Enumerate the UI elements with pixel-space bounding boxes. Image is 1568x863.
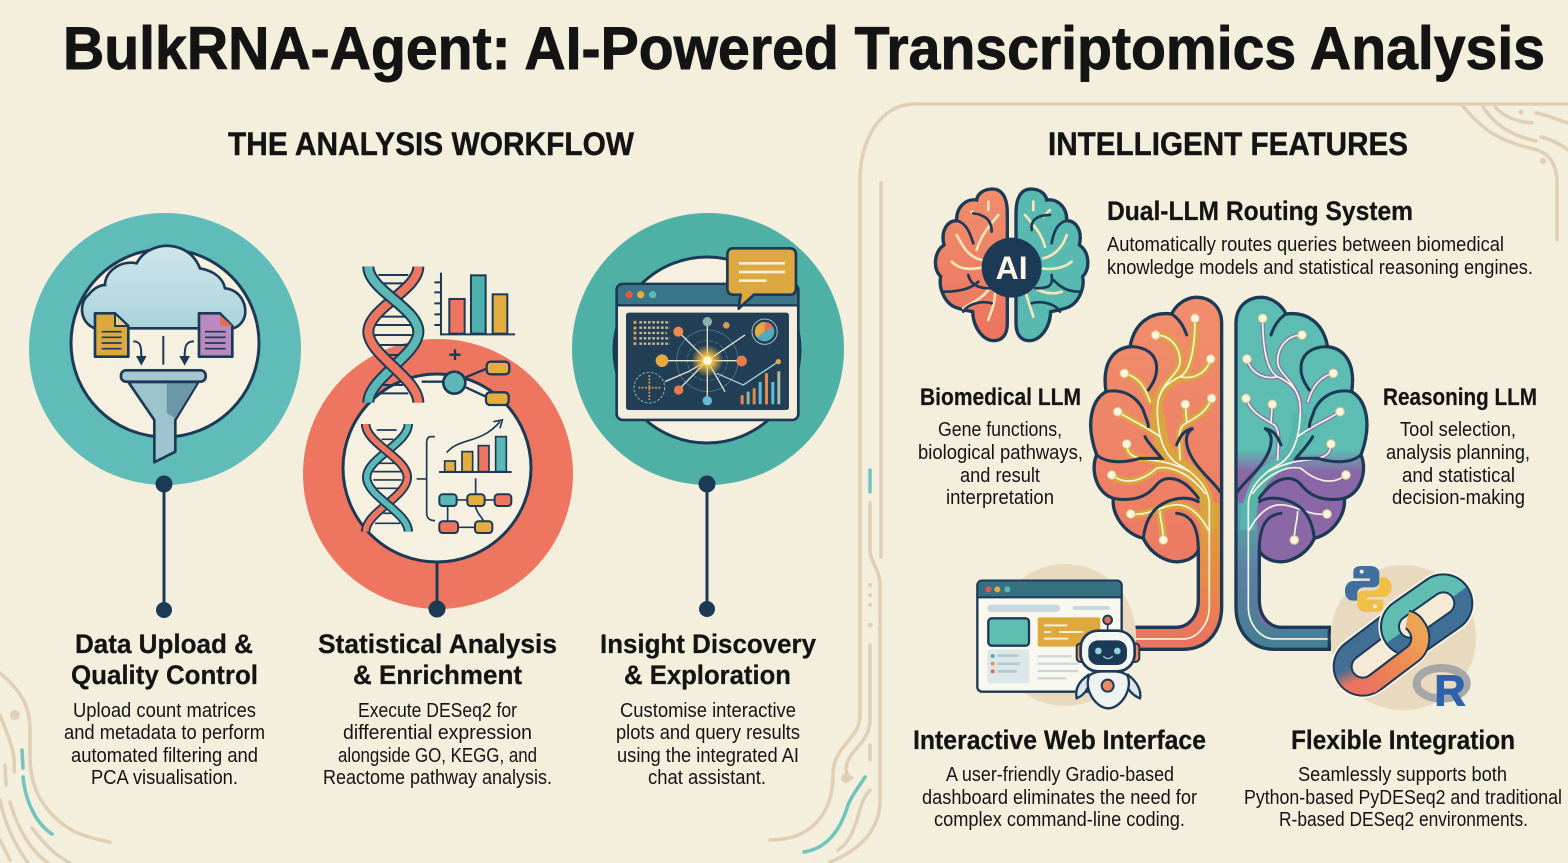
python logo (1345, 566, 1392, 612)
icon: cloud, documents and funnel (29, 213, 301, 485)
heading: the analysis workflow: THE ANALYSIS WORKFLOW (228, 126, 635, 162)
step 3 text: Customise interactive (620, 700, 796, 722)
AI label: AI (996, 250, 1028, 286)
step 2 text: alongside GO, KEGG, and (338, 745, 537, 767)
step 2 text: & Enrichment (353, 660, 522, 690)
interactive web interface text (913, 725, 1206, 831)
heading: intelligent features: INTELLIGENT FEATURES (1048, 126, 1408, 162)
lower chain link (1363, 638, 1400, 667)
central split brain with tree branches and pipes (1091, 297, 1367, 649)
flexible integration text (1244, 725, 1562, 831)
biomedical LLM text: Biomedical LLM (920, 384, 1081, 411)
biomedical LLM text: interpretation (946, 487, 1054, 509)
connector: step 3 pin (698, 476, 716, 617)
biomedical LLM text: Gene functions, (938, 419, 1062, 441)
feature: dual-LLM routing system (935, 189, 1533, 341)
reasoning LLM text: and statistical (1402, 465, 1515, 487)
reasoning LLM text: Tool selection, (1400, 419, 1516, 441)
step 3 text: chat assistant. (648, 767, 766, 789)
connector: step 2 pin (428, 562, 446, 618)
interactive web interface text: dashboard eliminates the need for (922, 787, 1197, 809)
dual-LLM text: knowledge models and statistical reasoning engines. (1107, 257, 1533, 279)
step 1 text: Upload count matrices (73, 700, 256, 722)
step 3 text: Insight Discovery (600, 629, 816, 659)
step 1 text (64, 629, 265, 789)
interactive web interface text: A user-friendly Gradio-based (946, 764, 1174, 786)
reasoning LLM text (1383, 384, 1537, 509)
step 1 text: automated filtering and (71, 745, 258, 767)
step 1 text: Data Upload & (75, 629, 253, 659)
step 2 text: differential expression (343, 722, 532, 744)
upper chain link (1390, 583, 1460, 638)
step 3 text (600, 629, 816, 789)
chain overlap (1370, 620, 1420, 686)
feature: flexible integration (1244, 565, 1562, 831)
step 2 text: Execute DESeq2 for (358, 700, 517, 722)
step 2: statistical analysis and enrichment (303, 267, 573, 789)
step 3: insight discovery and exploration (572, 213, 844, 789)
step 1: data upload and quality control (29, 213, 301, 789)
reasoning LLM text: decision-making (1392, 487, 1525, 509)
biomedical LLM text: biological pathways, (918, 442, 1083, 464)
robot (1076, 616, 1140, 708)
step 3 text: plots and query results (616, 722, 800, 744)
dual-LLM text (1107, 196, 1533, 279)
dual-LLM text: Automatically routes queries between biomedical (1107, 234, 1504, 256)
step 2 text: Reactome pathway analysis. (323, 767, 552, 789)
icon: DNA helices, charts and pathway graph (303, 267, 573, 609)
flexible integration text: Flexible Integration (1291, 725, 1515, 755)
right hemisphere (1236, 297, 1367, 649)
step 1 text: PCA visualisation. (91, 767, 238, 789)
icon: web window with robot (977, 564, 1140, 708)
step 2 text (318, 629, 557, 789)
step 3 text: & Exploration (624, 660, 791, 690)
R logo: R (1434, 668, 1466, 716)
biomedical LLM text (918, 384, 1083, 509)
biomedical LLM text: and result (960, 465, 1040, 487)
step 1 text: Quality Control (71, 660, 258, 690)
step 3 text: using the integrated AI (617, 745, 799, 767)
flexible integration text: Seamlessly supports both (1298, 764, 1507, 786)
interactive web interface text: complex command-line coding. (934, 809, 1185, 831)
connector: step 1 pin (156, 476, 172, 618)
icon: AI brain (935, 189, 1088, 341)
reasoning LLM text: analysis planning, (1386, 442, 1530, 464)
reasoning LLM text: Reasoning LLM (1383, 384, 1537, 411)
dual-LLM text: Dual-LLM Routing System (1107, 196, 1413, 226)
flexible integration text: R-based DESeq2 environments. (1279, 809, 1528, 831)
feature: interactive web interface (913, 564, 1206, 831)
step 2 text: Statistical Analysis (318, 629, 557, 659)
interactive web interface text: Interactive Web Interface (913, 725, 1206, 755)
icon: dashboard window with network and chat bubble (572, 213, 844, 485)
left hemisphere (1091, 297, 1222, 649)
icon: chain link with Python and R logos (1331, 565, 1476, 716)
step 1 text: and metadata to perform (64, 722, 265, 744)
